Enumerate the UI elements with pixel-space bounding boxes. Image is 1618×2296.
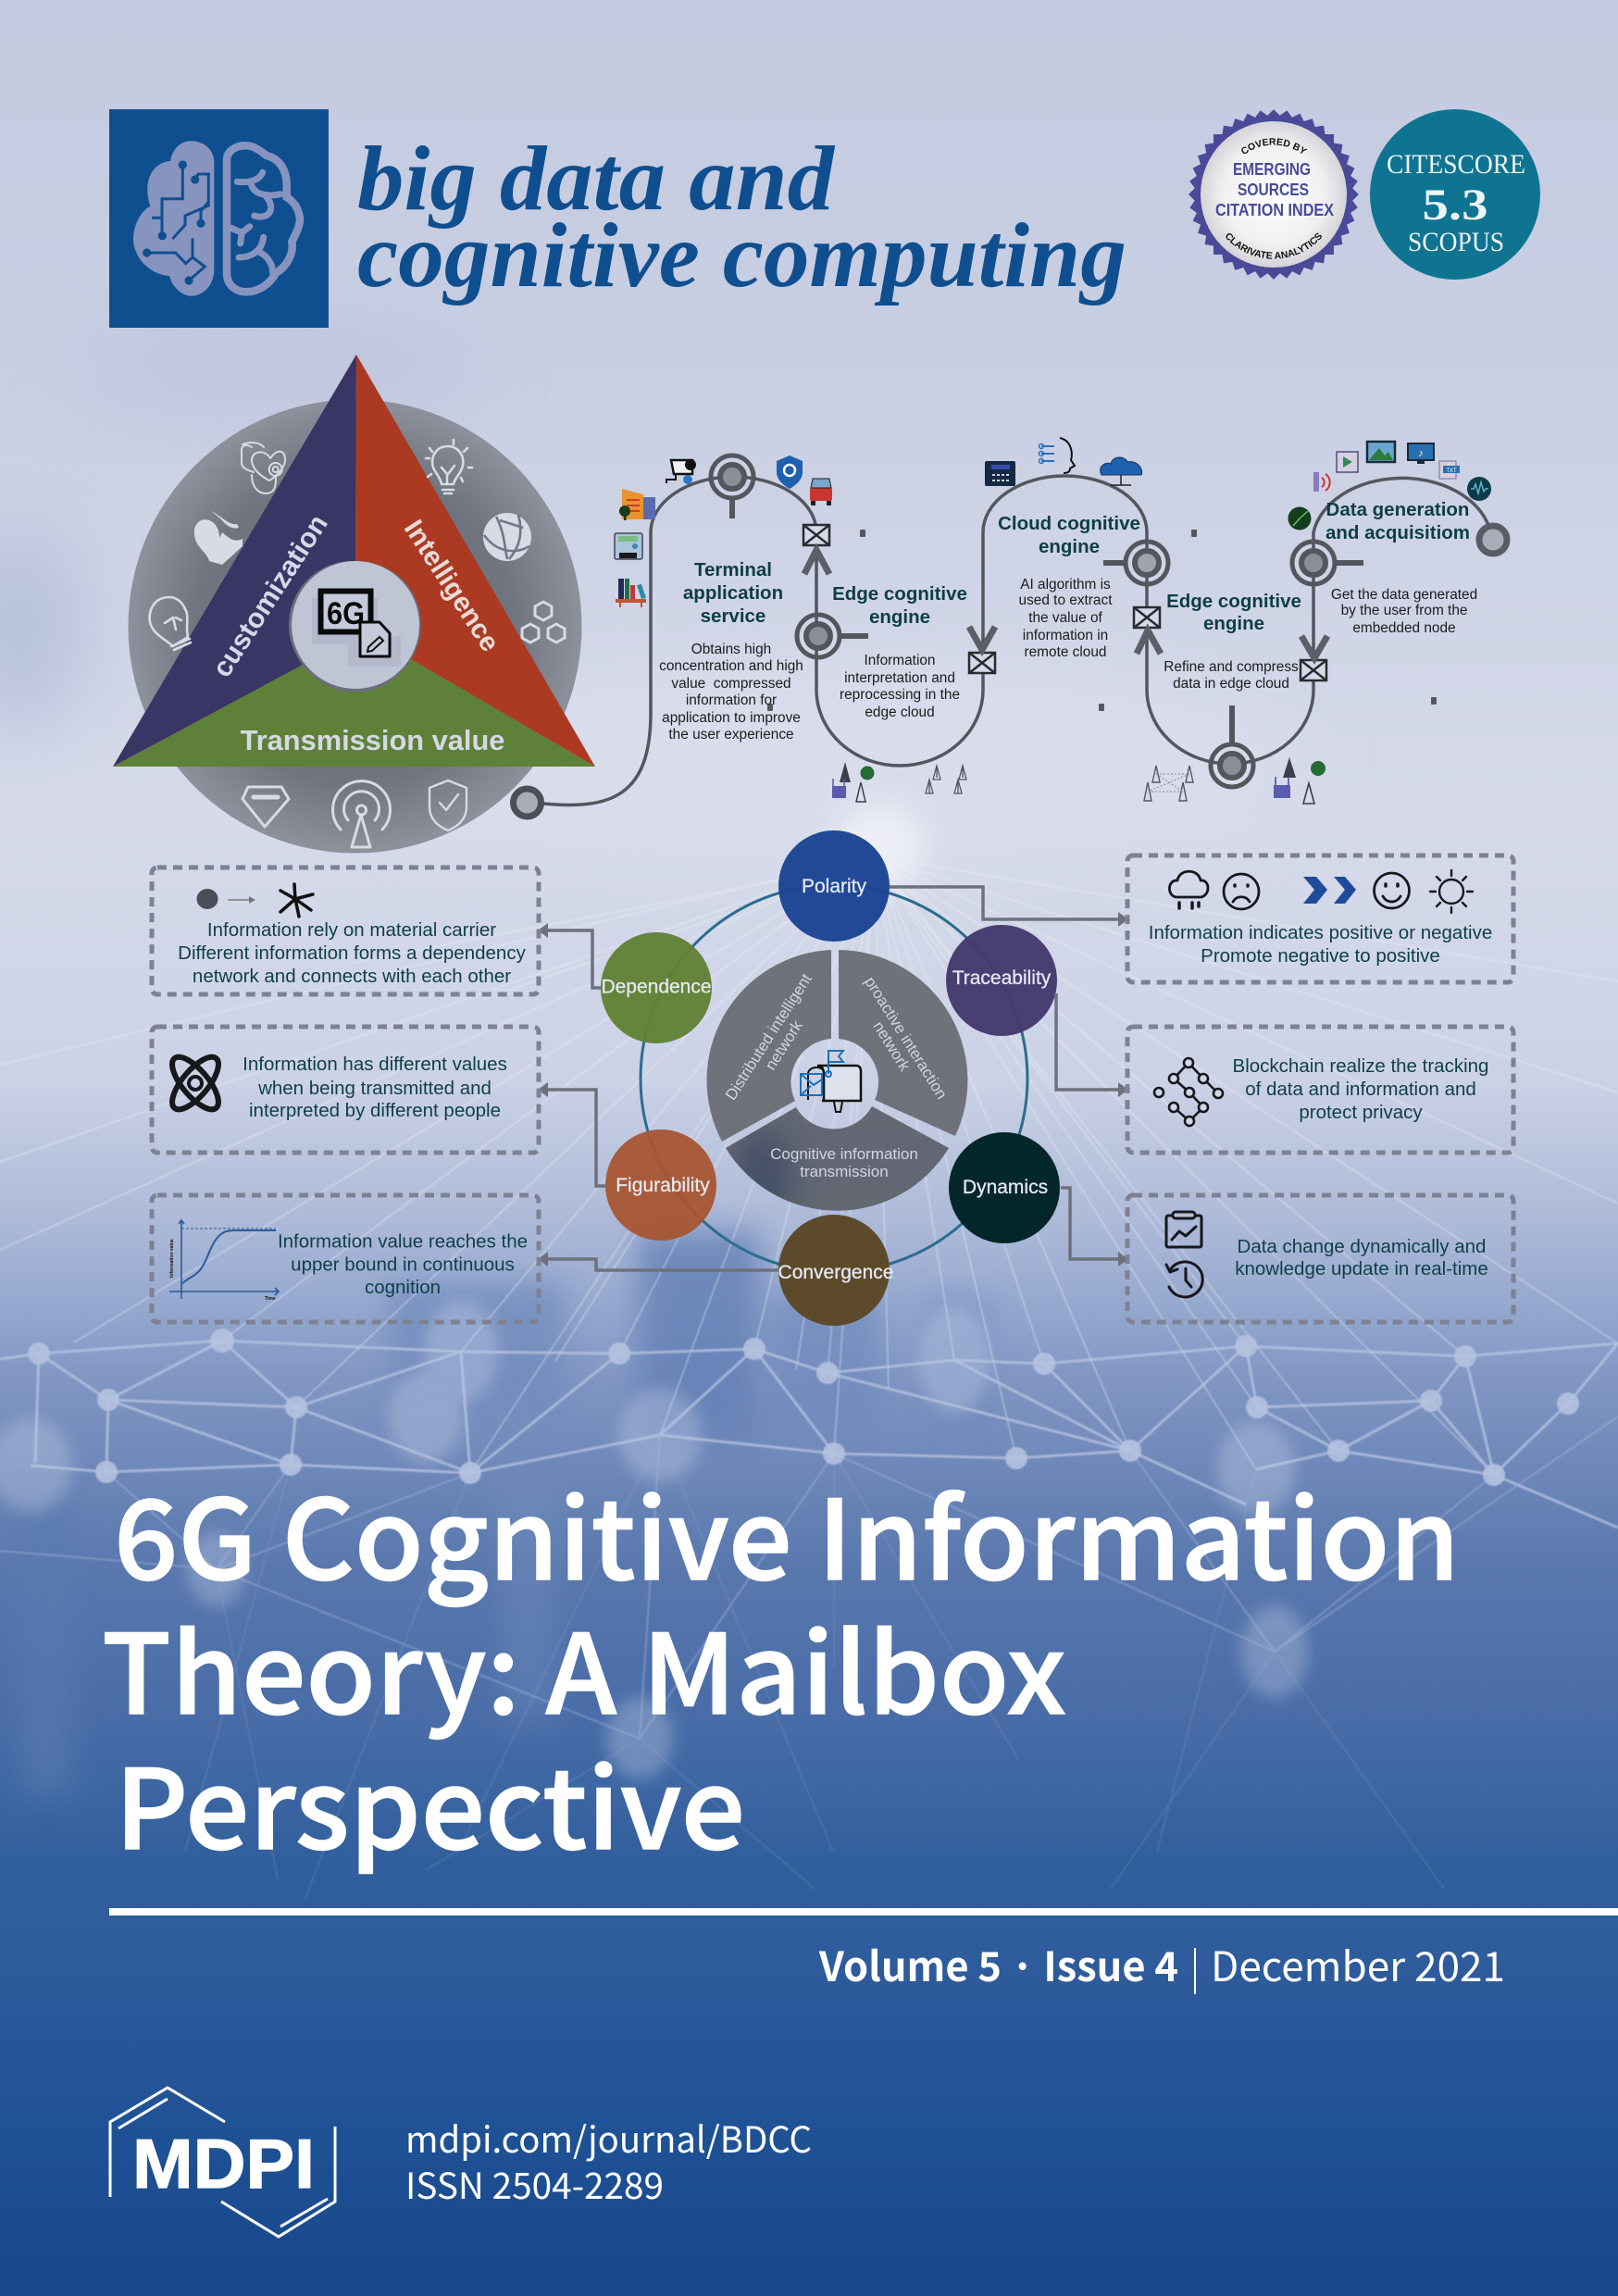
label: distributed intelligent: Distributed intelligent: [722, 970, 815, 1104]
text block: edge cognitive engine 1: Edge cognitive: [832, 583, 967, 605]
icon: txt file: [1439, 461, 1460, 479]
icon: shield check: [429, 780, 467, 830]
text block: edge cognitive engine 1: edge cloud: [865, 705, 935, 720]
icon: person with book: [194, 511, 243, 565]
text block: edge cognitive engine 1: engine: [869, 606, 930, 628]
node: edge 1: [797, 615, 868, 657]
sector: distributed intelligent network: [707, 950, 831, 1142]
panel: figurability callout: interpreted by different people: [249, 1100, 501, 1121]
circle: figurability: Figurability: [616, 1175, 710, 1196]
circle: convergence: [778, 1215, 893, 1326]
panel: dependence callout: Different information forms a dependency: [178, 942, 527, 964]
panel: dependence callout: Information rely on material carrier: [207, 919, 496, 941]
icon: speaker: [1313, 472, 1330, 492]
text block: data generation: Get the data generated: [1331, 587, 1477, 603]
triangle segment: customization: [113, 355, 356, 767]
text block: edge cognitive engine 2: engine: [1203, 613, 1264, 634]
text block: cloud cognitive engine: the value of: [1028, 610, 1103, 626]
journal title: cognitive computing: [357, 204, 1126, 306]
icon: camera: [666, 459, 696, 484]
centre circle with 6G icon: [292, 561, 419, 689]
label: intelligence: Intelligence: [398, 515, 505, 657]
panel: figurability callout: Information has different values: [243, 1054, 507, 1075]
title: article title: Theory: A Mailbox: [102, 1587, 1066, 1746]
badge: emerging sources citation index: [1189, 109, 1359, 280]
text block: edge cognitive engine 1: reprocessing in the: [840, 687, 960, 703]
journal url and ISSN: ISSN 2504-2289: [405, 2158, 664, 2210]
chart: outer ring of six information properties: [641, 885, 1027, 1272]
circle: traceability: Traceability: [952, 967, 1052, 989]
circle: convergence: Convergence: [778, 1262, 893, 1283]
icon: antenna: [332, 781, 391, 847]
journal url and ISSN: [405, 2112, 812, 2210]
divider rule: [109, 1908, 1618, 1915]
badge: emerging sources citation index: CLARIVATE ANALYTICS: [1226, 233, 1322, 259]
logo: MDPI: MDPI: [132, 2125, 315, 2202]
text block: edge cognitive engine 1: interpretation and: [844, 670, 955, 686]
icon: lightbulb: [426, 440, 472, 493]
node: data: [1292, 542, 1363, 584]
icon: car: [810, 479, 832, 505]
text block: cloud cognitive engine: [998, 513, 1140, 660]
node: edge 2: [1211, 705, 1253, 787]
icon: atom knot: [165, 1050, 226, 1117]
icon: image: [1367, 442, 1395, 462]
text block: terminal application service: concentration and high: [659, 658, 803, 674]
centre circle with 6G icon: 6G: [327, 596, 365, 631]
start node: [513, 789, 541, 817]
panel: traceability callout: [1127, 1027, 1513, 1153]
icon: txt file: TXT: [1446, 468, 1457, 474]
journal url and ISSN: mdpi.com/journal/BDCC: [405, 2112, 812, 2164]
label: cognitive information transmission: Cognitive information: [770, 1145, 918, 1163]
text block: data generation: [1326, 499, 1477, 636]
icon: rain cloud: [1169, 871, 1208, 908]
label: proactive interaction: proactive interaction: [861, 974, 951, 1103]
icon: hexagons: [522, 602, 565, 643]
icon: mailbox: [801, 1051, 861, 1112]
sector: proactive interaction network: [839, 950, 967, 1136]
text block: cloud cognitive engine: AI algorithm is: [1020, 577, 1111, 593]
panel: figurability callout: [152, 1027, 539, 1153]
text block: cloud cognitive engine: remote cloud: [1025, 644, 1106, 660]
node: terminal: [711, 455, 753, 518]
small dots: [767, 530, 1437, 711]
panel: figurability callout: when being transmitted and: [257, 1078, 492, 1099]
icon: clock history: [1166, 1262, 1202, 1297]
panel: polarity callout: Information indicates positive or negative: [1149, 922, 1492, 943]
text block: edge cognitive engine 1: Information: [865, 653, 935, 668]
icon: gear shield: [777, 455, 803, 489]
sector: cognitive information transmission: [726, 1106, 949, 1222]
chart: information value curve: Time: [265, 1296, 276, 1302]
text block: terminal application service: application to improve: [662, 710, 801, 726]
circle: polarity: Polarity: [802, 876, 867, 897]
badge: emerging sources citation index: CITATION INDEX: [1215, 201, 1334, 219]
issue information: [818, 1934, 1505, 1994]
label: transmission value: Transmission value: [241, 724, 504, 756]
badge: emerging sources citation index: COVERED BY: [1241, 138, 1307, 154]
badge: citescore 5.3 scopus: SCOPUS: [1408, 227, 1504, 257]
issue information: Volume 5 · Issue 4: [818, 1934, 1178, 1993]
icon: video file: [1337, 452, 1358, 472]
icon: diamond: [243, 787, 289, 827]
panel: convergence callout: upper bound in continuous: [291, 1254, 515, 1276]
text block: data generation: and acquisitiom: [1326, 522, 1470, 543]
circle: traceability: [946, 925, 1057, 1036]
icon: monitor: ♪: [1418, 448, 1424, 459]
triangle segment: intelligence: [355, 355, 595, 767]
title: article title: Perspective: [115, 1722, 745, 1881]
icon: clipboard chart: [1166, 1212, 1201, 1247]
background: radiating network fan lines: [0, 856, 1618, 1475]
text block: terminal application service: Terminal: [694, 559, 772, 580]
panel: dynamics callout: knowledge update in real-time: [1235, 1258, 1488, 1279]
panel: polarity callout: Promote negative to positive: [1201, 945, 1440, 967]
text block: terminal application service: [659, 559, 803, 742]
icon: blockchain: [1154, 1058, 1223, 1126]
text block: terminal application service: information for: [686, 693, 777, 708]
text block: cloud cognitive engine: engine: [1039, 536, 1100, 557]
panel: traceability callout: protect privacy: [1299, 1102, 1423, 1123]
arrows: [804, 550, 1327, 658]
circle: figurability: [605, 1129, 716, 1241]
panel: dynamics callout: [1127, 1195, 1513, 1322]
panel: dependence callout: network and connects with each other: [193, 966, 511, 987]
label: cognitive information transmission: [770, 1145, 918, 1180]
icon: building: [619, 489, 655, 520]
badge: citescore 5.3 scopus: [1370, 109, 1540, 280]
panel: convergence callout: cognition: [365, 1277, 441, 1298]
chart: information value curve: [169, 1220, 279, 1302]
icon: AI head: [1039, 438, 1075, 473]
panel: 6G triangle diagram: [113, 355, 595, 854]
text block: terminal application service: Obtains high: [691, 642, 771, 657]
text block: cloud cognitive engine: used to extract: [1019, 593, 1113, 608]
connector arrows: [538, 887, 1128, 1270]
circle: polarity: [778, 830, 890, 942]
text block: edge cognitive engine 2: Edge cognitive: [1166, 591, 1301, 612]
issue information: December 2021: [1211, 1934, 1505, 1993]
panel: traceability callout: of data and information and: [1245, 1079, 1476, 1100]
text block: data generation: by the user from the: [1341, 603, 1467, 618]
text block: terminal application service: application: [683, 582, 783, 604]
panel: polarity callout: [1127, 855, 1513, 982]
icon: smile face: [1374, 873, 1409, 908]
icons: network equipment under second U-bend: [1144, 757, 1326, 804]
label: network right: network: [869, 1018, 914, 1075]
badge: emerging sources citation index: EMERGING: [1233, 160, 1311, 179]
switch boxes: [803, 525, 1326, 680]
triangle segment: transmission value: [113, 659, 595, 767]
journal title: big data and: [357, 127, 836, 230]
icon: lightbulb with gear: [150, 597, 191, 650]
badge: citescore 5.3 scopus: 5.3: [1422, 181, 1488, 230]
panel: traceability callout: Blockchain realize the tracking: [1233, 1055, 1488, 1077]
icon: blue chevrons: [1303, 877, 1356, 904]
logo: MDPI: [110, 2088, 335, 2237]
badge: emerging sources citation index: SOURCES: [1238, 181, 1309, 199]
text block: data generation: Data generation: [1326, 499, 1469, 520]
journal title: [357, 127, 1126, 306]
node: cloud: [1103, 542, 1168, 584]
circle: dynamics: [949, 1132, 1060, 1243]
text block: edge cognitive engine 2: [1164, 591, 1301, 692]
icon: wave: [1467, 477, 1491, 501]
grey disc: [128, 400, 581, 854]
icon: carrier dot to molecule: [196, 884, 313, 917]
icon: blue cloud: [1101, 457, 1142, 485]
panel: cognitive information centre wheel: [707, 950, 967, 1222]
icon: sun: [1430, 870, 1473, 913]
icon: monitor: [1408, 443, 1434, 464]
chart: snake flow path: [513, 455, 1507, 817]
icons: network equipment under first U-bend: [832, 762, 966, 802]
icon: server: [985, 461, 1015, 486]
end node: [1479, 526, 1507, 554]
icon: sad face: [1224, 874, 1259, 909]
badge: citescore 5.3 scopus: CITESCORE: [1387, 149, 1525, 180]
label: customization: customization: [206, 509, 334, 682]
circle: dependence: Dependence: [601, 976, 712, 998]
text block: edge cognitive engine 2: data in edge cloud: [1173, 676, 1289, 692]
circle: dynamics: Dynamics: [963, 1177, 1048, 1198]
label: cognitive information transmission: transmission: [800, 1163, 889, 1180]
circle: dependence: [601, 932, 712, 1043]
text block: cloud cognitive engine: information in: [1023, 628, 1108, 643]
title: article title: [102, 1453, 1460, 1881]
text block: cloud cognitive engine: Cloud cognitive: [998, 513, 1140, 534]
icon: heart stethoscope: [242, 443, 285, 493]
panel: dependence callout: [152, 867, 539, 994]
icon: globe network: [483, 513, 531, 561]
panel: convergence callout: Information value reaches the: [278, 1231, 528, 1252]
icon: meter: [615, 533, 642, 559]
text block: terminal application service: the user experience: [668, 727, 794, 742]
text block: terminal application service: service: [701, 605, 765, 627]
title: article title: 6G Cognitive Information: [114, 1453, 1460, 1612]
icon: books: [616, 579, 646, 607]
text block: terminal application service: value compressed: [671, 676, 791, 692]
text block: data generation: embedded node: [1352, 620, 1456, 636]
journal logo: blue square with brain: [109, 109, 329, 328]
panel: dynamics callout: Data change dynamically and: [1238, 1236, 1486, 1257]
panel: convergence callout: [152, 1195, 539, 1322]
text block: edge cognitive engine 1: [832, 583, 967, 720]
chart: information value curve: Information value: [169, 1239, 175, 1278]
icon: radar: [1288, 507, 1311, 530]
label: network left: network: [762, 1017, 806, 1073]
background: glowing network nodes and links: [0, 1301, 1618, 1898]
text block: edge cognitive engine 2: Refine and compress: [1164, 659, 1299, 675]
